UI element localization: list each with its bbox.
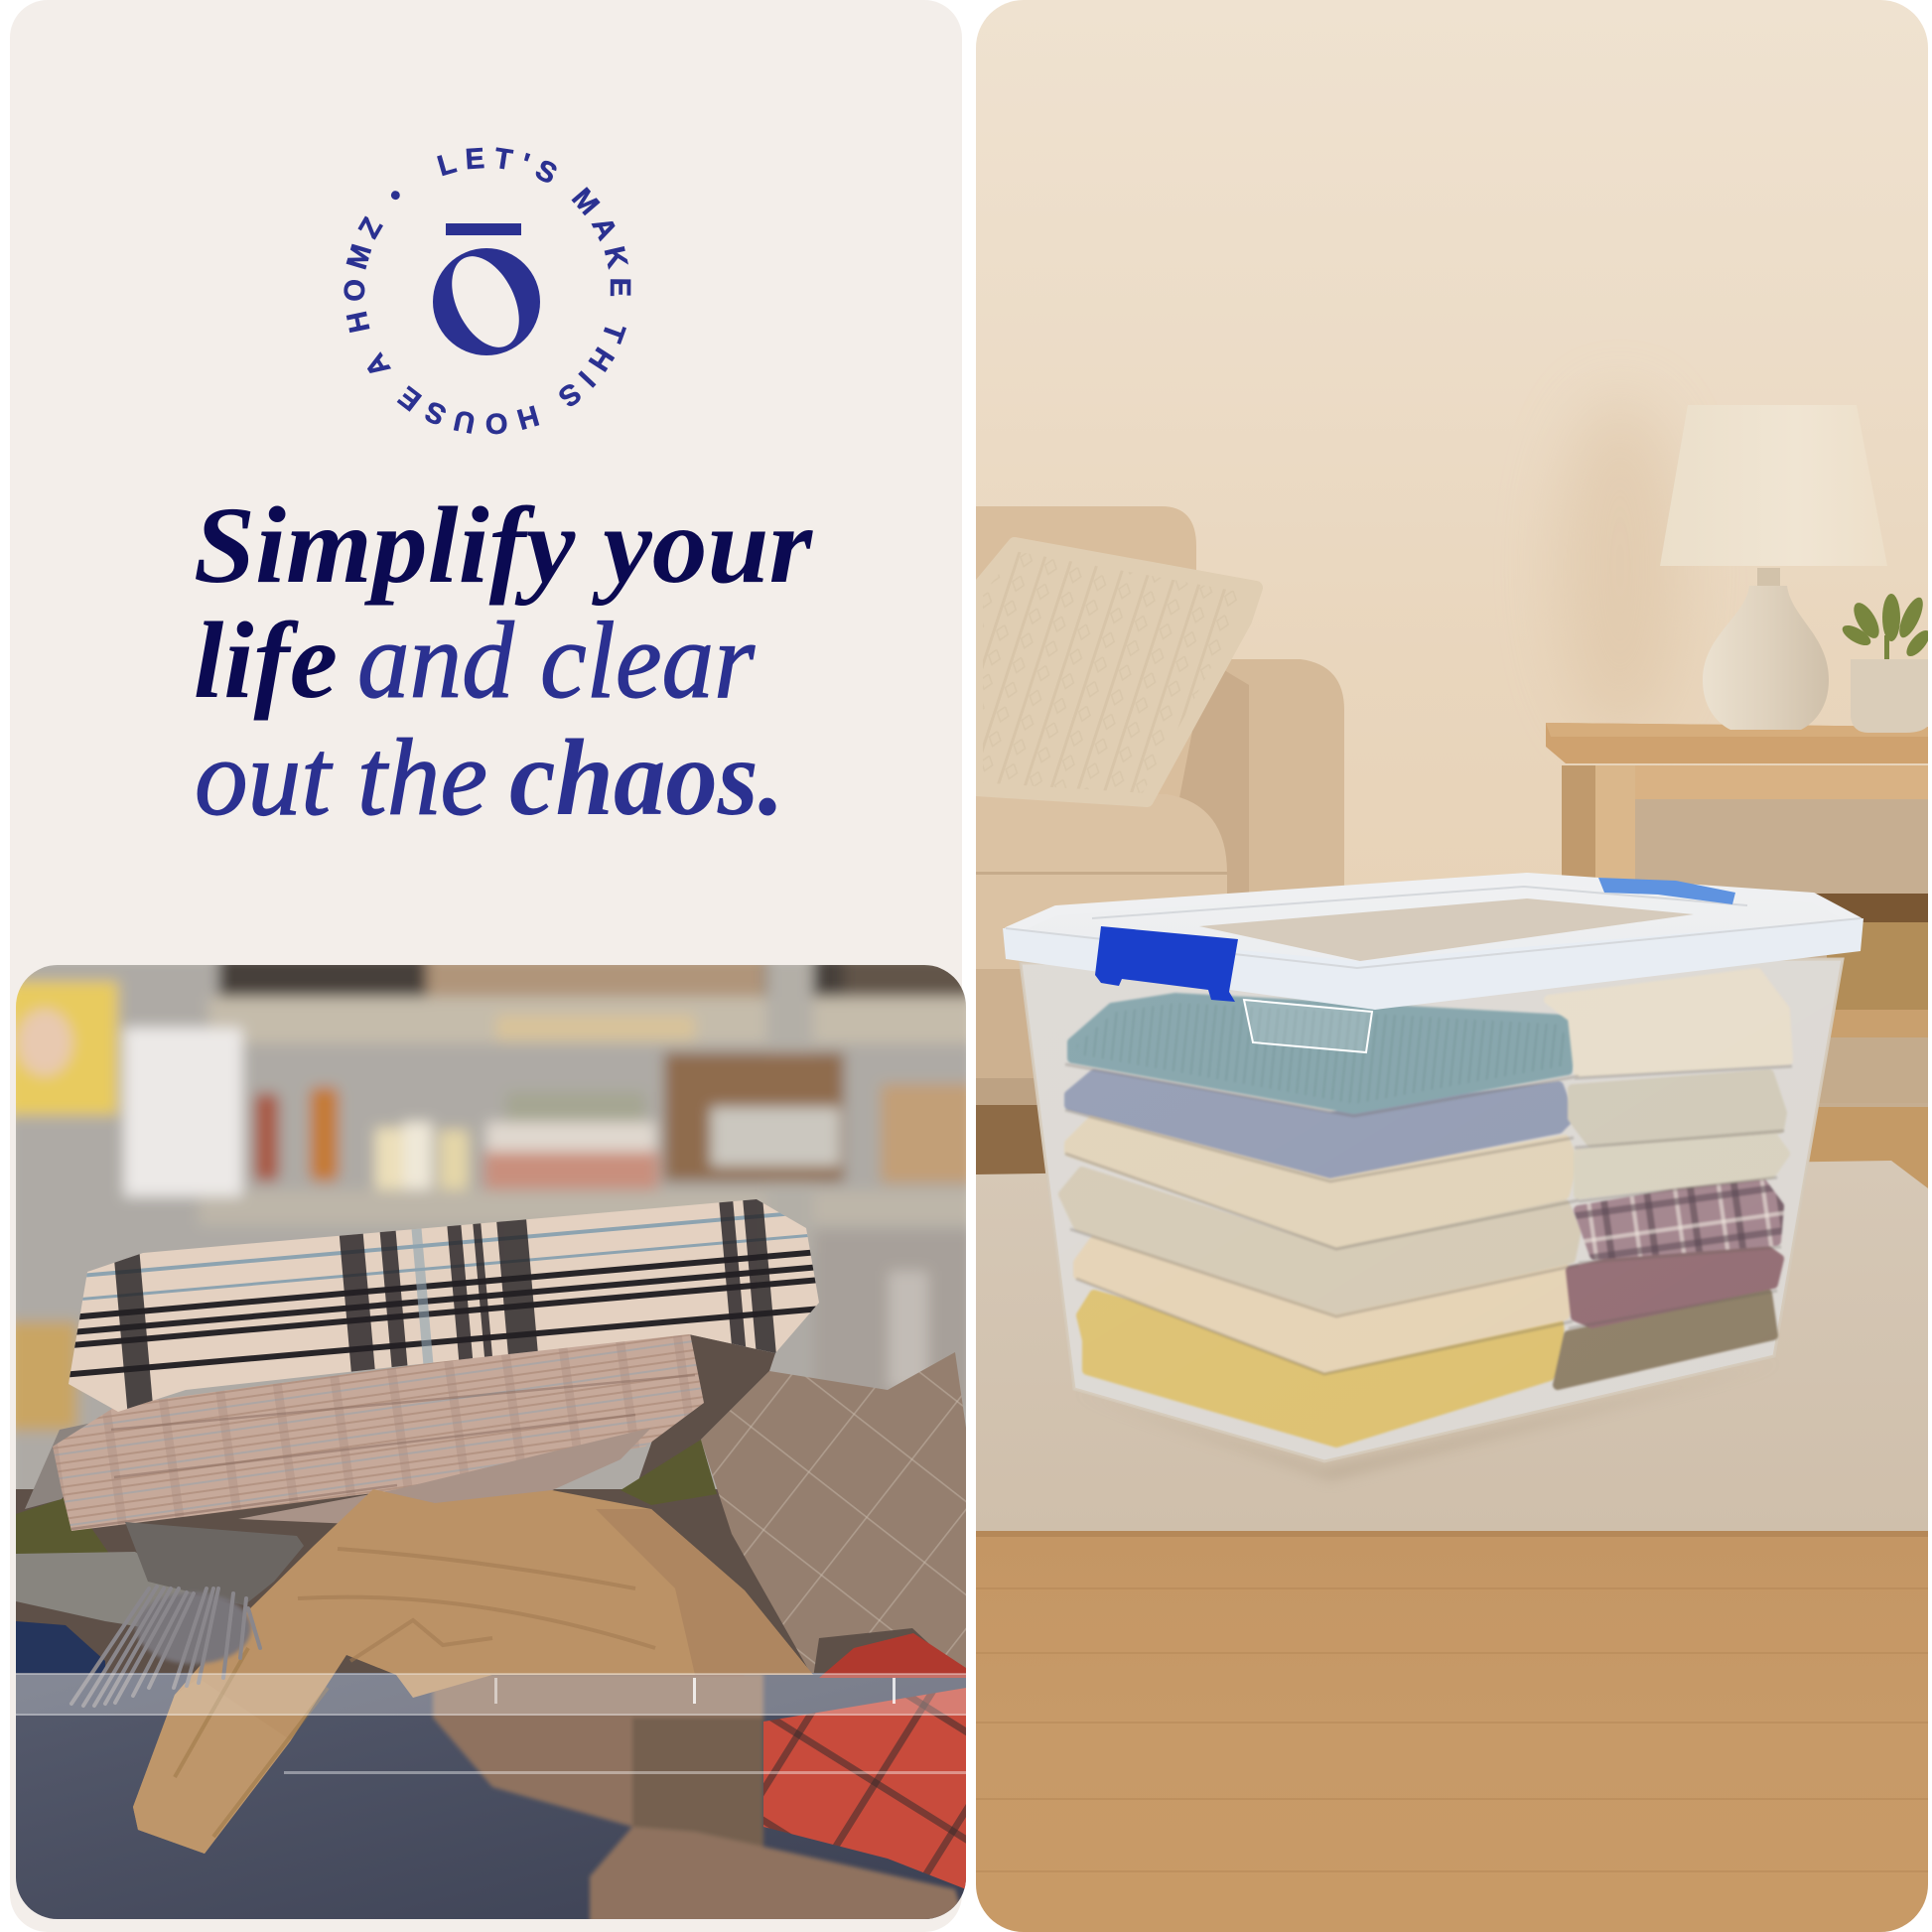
- photo: messy clothes in a bin: [6, 955, 976, 1926]
- photo: tidy storage room scene: [976, 0, 1932, 1932]
- rug: [976, 1161, 1932, 1531]
- folded clothes: left stack: [1063, 998, 1577, 1443]
- navy garment behind bin wall: [16, 1673, 966, 1921]
- sofa: [976, 506, 1344, 1105]
- box body: [1021, 959, 1843, 1461]
- grey knit throw: [16, 1522, 304, 1628]
- transparent handle tab: [1244, 1000, 1372, 1052]
- woven basket: [1747, 894, 1932, 1010]
- wool fringe: [71, 1587, 260, 1706]
- translucent tan garment in bin: [433, 1673, 966, 1926]
- blurred shelving background: [6, 955, 976, 1511]
- knit cushion: [976, 544, 1256, 800]
- headline: life: [194, 600, 338, 721]
- back blue clip: [1598, 878, 1735, 904]
- panel: cream headline card: [10, 0, 962, 1932]
- plaid roll: [30, 1127, 846, 1483]
- black and white scarf edge: [25, 1424, 89, 1509]
- lamp base: [1703, 586, 1829, 730]
- logo badge: [344, 147, 631, 435]
- headline: out the: [195, 717, 487, 838]
- red plaid upper: [819, 1633, 966, 1678]
- olive textile: [16, 1440, 717, 1561]
- headline: chaos.: [509, 717, 784, 838]
- wood floor: [976, 1529, 1932, 1932]
- translucent front veil: [1021, 959, 1843, 1461]
- logo circular slogan: LET'S MAKE THIS HOUSE A HOMZ •: [344, 147, 631, 435]
- storage box: [1003, 878, 1863, 1479]
- fringe: [238, 1428, 651, 1529]
- pink check fold: [53, 1328, 704, 1531]
- headline: Simplify your: [194, 484, 813, 606]
- folded clothes: right stack: [1549, 973, 1788, 1385]
- headline: [194, 484, 813, 838]
- headline: and clear: [357, 600, 756, 721]
- side table: [1546, 723, 1932, 1107]
- table lamp: [1660, 405, 1887, 730]
- red plaid in bin: [763, 1688, 966, 1889]
- lamp neck: [1757, 568, 1780, 588]
- bin rim: [16, 1673, 966, 1774]
- clothing fold seams: [1065, 1064, 1792, 1374]
- logo letter o: [433, 245, 540, 358]
- front blue clip: [1095, 926, 1238, 1002]
- floor behind rug: [976, 1105, 1932, 1194]
- potted plant: [1840, 594, 1932, 733]
- navy garment upper: [16, 1621, 105, 1678]
- brown check blanket: [701, 1352, 966, 1678]
- lamp shade: [1660, 405, 1887, 566]
- box shadow: [1074, 1362, 1782, 1479]
- dark base fill: [16, 1489, 929, 1673]
- lamp shadow on wall: [1559, 397, 1682, 735]
- lid: [1003, 878, 1863, 1010]
- logo bar: [446, 223, 521, 235]
- wall: [976, 0, 1932, 1191]
- tan shirt: [133, 1489, 813, 1854]
